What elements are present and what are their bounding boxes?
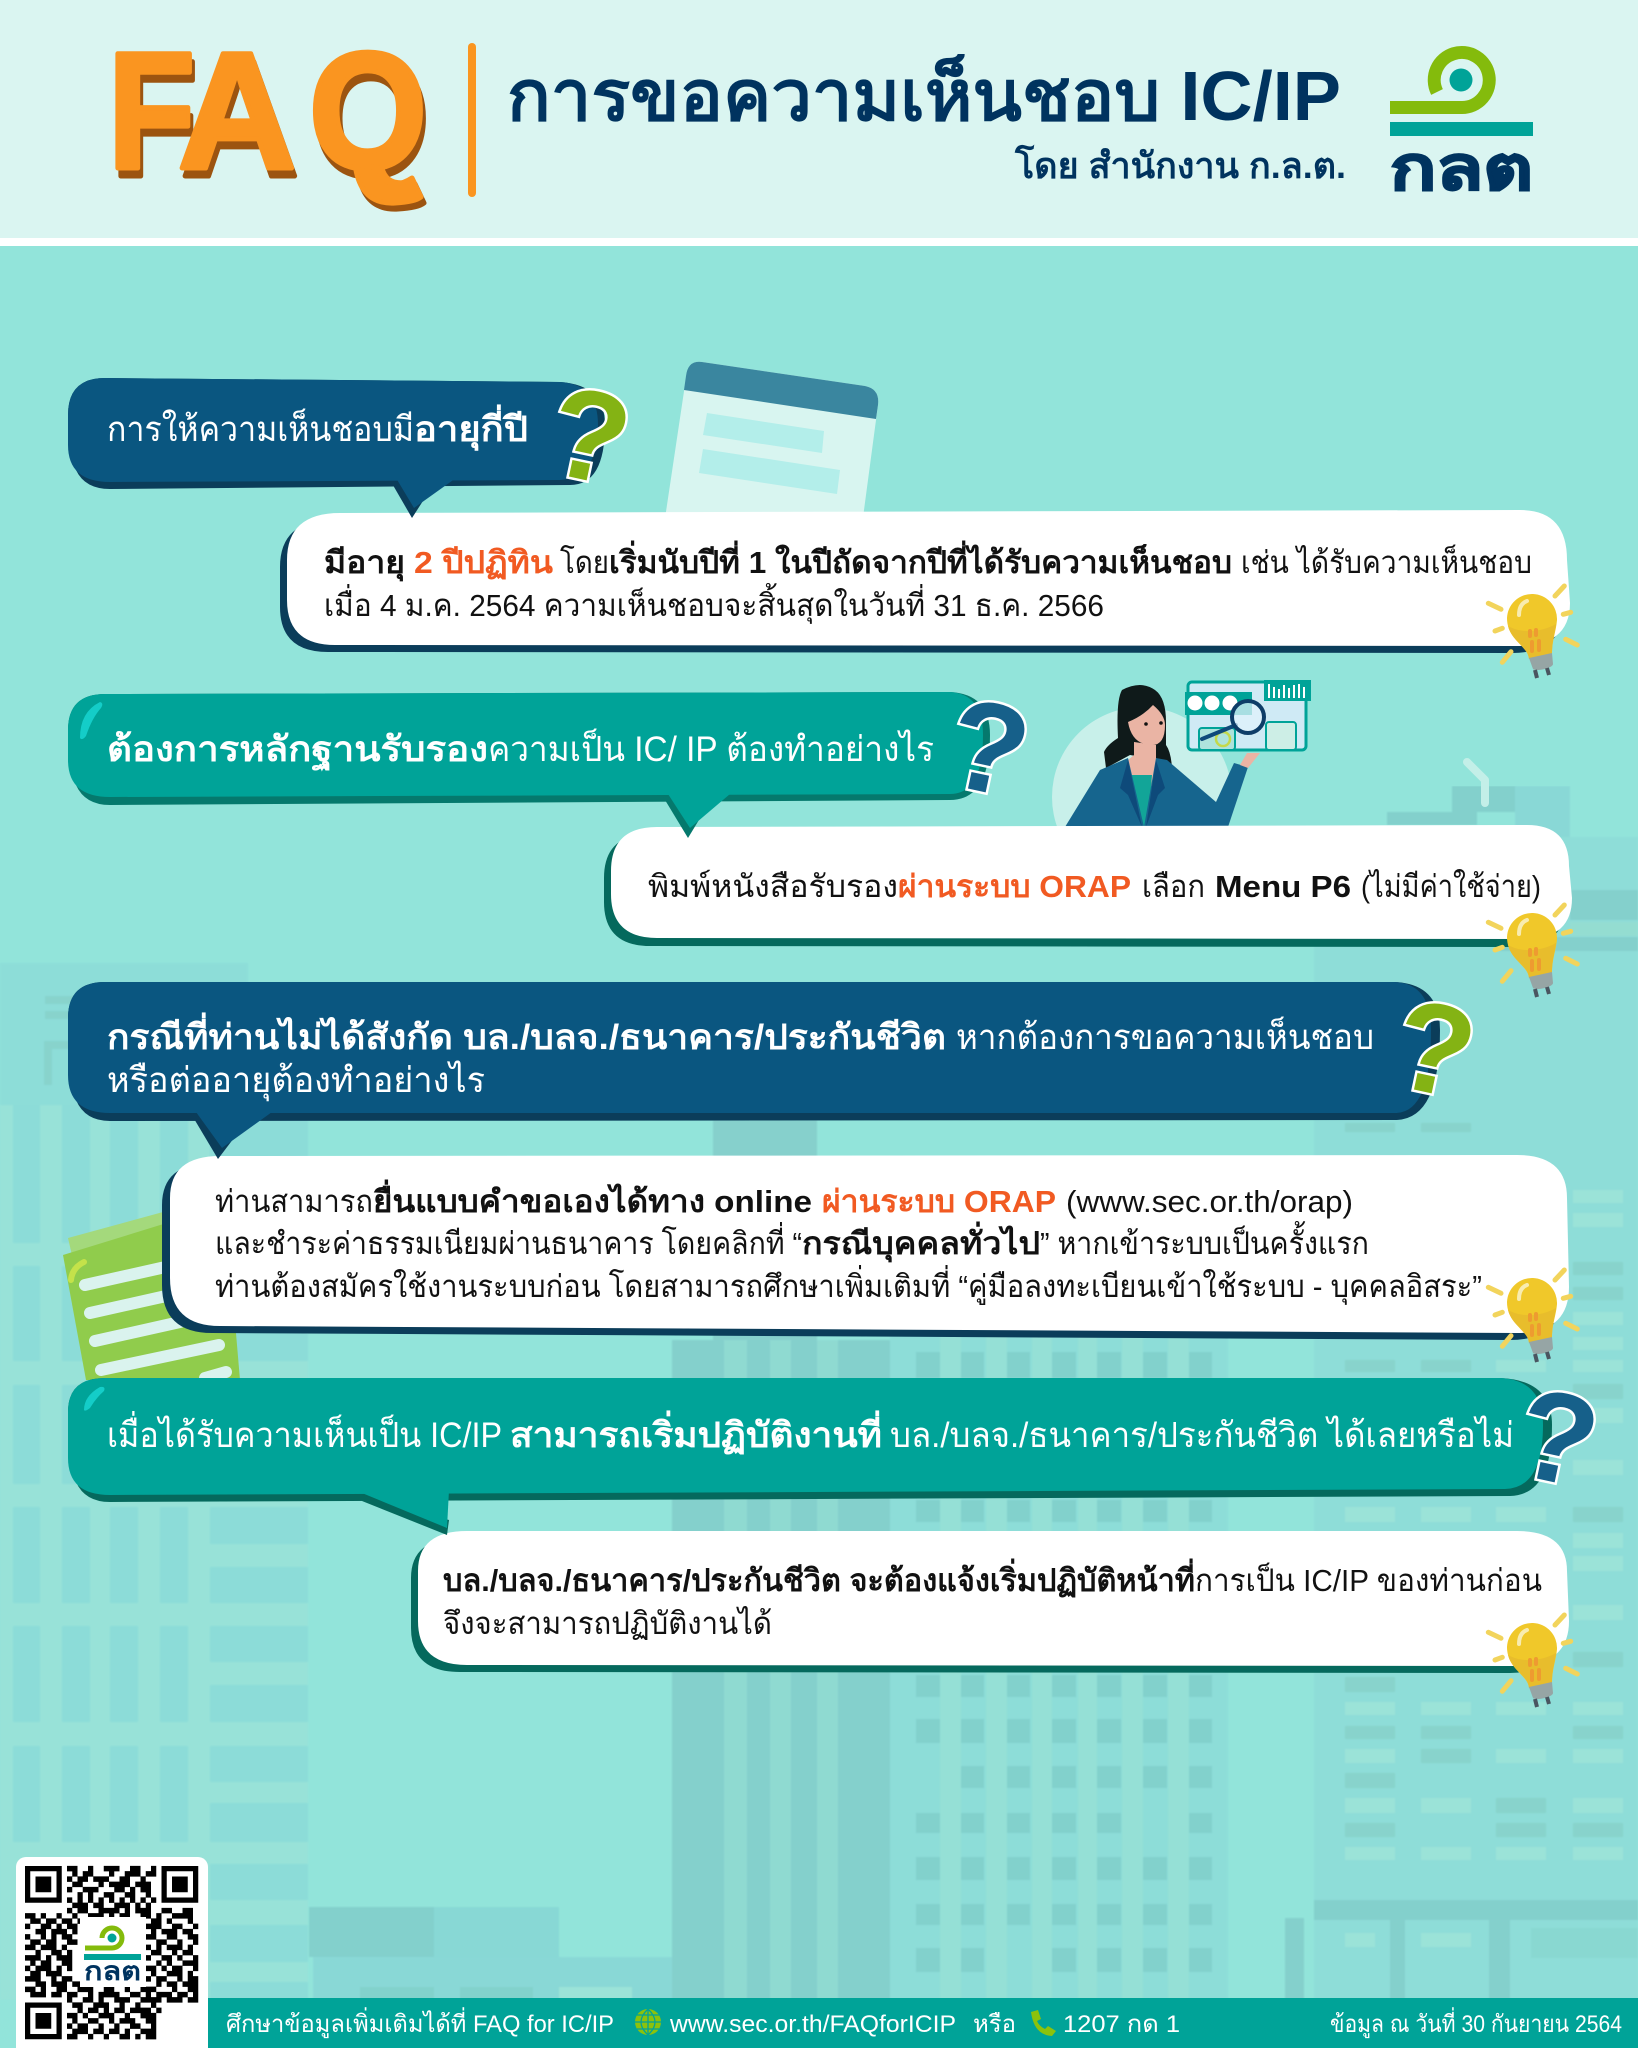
header: divider <box>468 43 476 197</box>
illustration: browser window document <box>664 362 878 525</box>
panel: answer 4 <box>411 1531 1569 1673</box>
header: FAQ wordmark: A <box>178 19 296 204</box>
panel: answer 2 <box>604 825 1572 947</box>
icon: lightbulb 3 <box>1488 1270 1577 1362</box>
header: FAQ wordmark: F <box>111 27 198 212</box>
question 3 text: กรณีที่ท่านไม่ได้สังกัด บล./บลจ./ธนาคาร/ประกันชีวิต <box>107 1012 946 1057</box>
question 2 text: ต้องการหลักฐานรับรอง <box>107 730 488 772</box>
answer 2 bubble <box>604 825 1572 947</box>
answer 4 text: บล./บลจ./ธนาคาร/ประกันชีวิต จะต้องแจ้งเริ่มปฏิบัติหน้าที่ <box>443 1558 1195 1598</box>
question 3 text <box>107 1012 1374 1101</box>
question 4 bubble <box>68 1378 1552 1535</box>
question 2 bubble <box>68 692 990 838</box>
dashboard panel <box>1185 680 1311 750</box>
answer 3 text: กรณีบุคคลทั่วไป <box>802 1221 1040 1263</box>
question 4 text: บล./บลจ./ธนาคาร/ประกันชีวิต ได้เลยหรือไม่ <box>890 1415 1514 1455</box>
QR code card <box>16 1857 208 2048</box>
question 3 text: หากต้องการขอความเห็นชอบ <box>956 1016 1374 1057</box>
question 3 bubble <box>68 982 1440 1159</box>
answer 1 text: เริ่มนับปีที่ 1 ในปีถัดจากปีที่ได้รับความเห็นชอบ <box>609 540 1232 580</box>
header: subtitle: โดย สำนักงาน ก.ล.ต. <box>1014 144 1346 186</box>
header: SEC logo: กลต <box>1390 135 1533 202</box>
footer: phone number: 1207 กด 1 <box>1063 2011 1180 2038</box>
answer 4 bubble <box>411 1531 1569 1673</box>
answer 2 text: เลือก <box>1142 869 1205 904</box>
panel: question 1 <box>68 358 643 518</box>
illustration: green document <box>63 1195 240 1380</box>
answer 3 text: และชำระค่าธรรมเนียมผ่านธนาคาร โดยคลิกที่ “ <box>215 1222 802 1261</box>
question 3 text: หรือต่ออายุต้องทำอย่างไร <box>107 1060 485 1101</box>
answer 2 text: ผ่านระบบ ORAP <box>898 869 1131 904</box>
header: FAQ wordmark: Q <box>309 19 427 204</box>
panel: answer 1 <box>280 510 1570 653</box>
background: antenna hook <box>1467 762 1485 803</box>
QR centre logo <box>80 1917 146 1987</box>
answer 2 text: Menu P6 <box>1215 869 1351 904</box>
answer 3 text: ท่านสามารถ <box>215 1184 373 1219</box>
answer 4 text: จึงจะสามารถปฏิบัติงานได้ <box>443 1606 772 1641</box>
answer 2 text: (ไม่มีค่าใช้จ่าย) <box>1361 869 1541 904</box>
icon: globe <box>635 2009 661 2035</box>
highlight <box>80 702 102 739</box>
header band <box>0 0 1638 246</box>
answer 1 text: 2 ปีปฏิทิน <box>414 545 553 580</box>
QR centre logo: กลต <box>84 1956 141 1986</box>
footer: study more text: ศึกษาข้อมูลเพิ่มเติมได้ที่ FAQ for IC/IP <box>226 2007 614 2039</box>
header: FAQ wordmark: Q <box>312 27 430 212</box>
panel: question 4 <box>68 1360 1611 1535</box>
answer 1 text: เมื่อ 4 ม.ค. 2564 ความเห็นชอบจะสิ้นสุดในวันที่ 31 ธ.ค. 2566 <box>324 583 1104 625</box>
icon: question mark: ? <box>1504 1360 1611 1517</box>
answer 1 text: เช่น ได้รับความเห็นชอบ <box>1241 544 1532 580</box>
answer 3 text: ” หากเข้าระบบเป็นครั้งแรก <box>1040 1221 1369 1261</box>
answer 3 text: (www.sec.or.th/orap) <box>1066 1184 1353 1219</box>
header: FAQ wordmark: A <box>181 27 299 212</box>
question 1 text <box>107 404 528 451</box>
icon: question mark: ? <box>935 670 1042 827</box>
background: city buildings <box>0 786 1638 2000</box>
icon: lightbulb 4 <box>1488 1615 1577 1707</box>
question 1 text: การให้ความเห็นชอบมี <box>107 408 414 449</box>
answer 1 text <box>324 540 1532 625</box>
footer bar <box>200 1998 1638 2048</box>
panel: question 3 <box>68 971 1488 1159</box>
panel: question 2 <box>68 670 1042 838</box>
answer 3 bubble <box>162 1155 1569 1340</box>
icon: question mark: ? <box>1381 971 1488 1128</box>
answer 3 text: ท่านต้องสมัครใช้งานระบบก่อน โดยสามารถศึกษาเพิ่มเติมที่ “คู่มือลงทะเบียนเข้าใช้ระบบ - บุคคลอิสระ” <box>215 1265 1482 1306</box>
question 4 text: เมื่อได้รับความเห็นเป็น IC/IP <box>107 1411 502 1455</box>
answer 1 bubble <box>280 510 1570 653</box>
icon: phone <box>1031 2010 1056 2036</box>
answer 2 text <box>648 869 1541 904</box>
header: FAQ wordmark <box>108 19 430 212</box>
question 2 text <box>107 728 934 772</box>
question 4 text <box>107 1410 1514 1455</box>
header: title: การขอความเห็นชอบ IC/IP <box>507 53 1341 135</box>
illustration: woman with dashboard <box>1052 680 1311 887</box>
answer 4 text <box>443 1558 1542 1641</box>
panel: answer 3 <box>162 1155 1569 1340</box>
question 1 bubble <box>68 378 605 518</box>
icon: lightbulb 1 <box>1488 586 1577 678</box>
question 4 text: สามารถเริ่มปฏิบัติงานที่ <box>510 1410 882 1455</box>
header: SEC logo <box>1390 53 1533 202</box>
icon: question mark: ? <box>536 358 643 515</box>
answer 3 text: ผ่านระบบ ORAP <box>822 1184 1056 1219</box>
answer 2 text: พิมพ์หนังสือรับรอง <box>648 869 898 904</box>
answer 1 text: มีอายุ <box>324 545 405 582</box>
icon: lightbulb 2 <box>1488 905 1577 997</box>
question 2 text: ความเป็น IC/ IP ต้องทำอย่างไร <box>488 728 934 769</box>
QR modules <box>25 1869 198 2037</box>
answer 3 text: ยื่นแบบคำขอเองได้ทาง online <box>373 1179 812 1219</box>
question 1 text: อายุกี่ปี <box>414 404 528 451</box>
footer: or: หรือ <box>973 2011 1016 2038</box>
answer 4 text: การเป็น IC/IP ของท่านก่อน <box>1195 1562 1542 1598</box>
header: FAQ wordmark: F <box>108 19 195 204</box>
footer: website: www.sec.or.th/FAQforICIP <box>669 2011 956 2038</box>
answer 1 text: โดย <box>560 545 609 580</box>
answer 3 text <box>215 1179 1482 1306</box>
